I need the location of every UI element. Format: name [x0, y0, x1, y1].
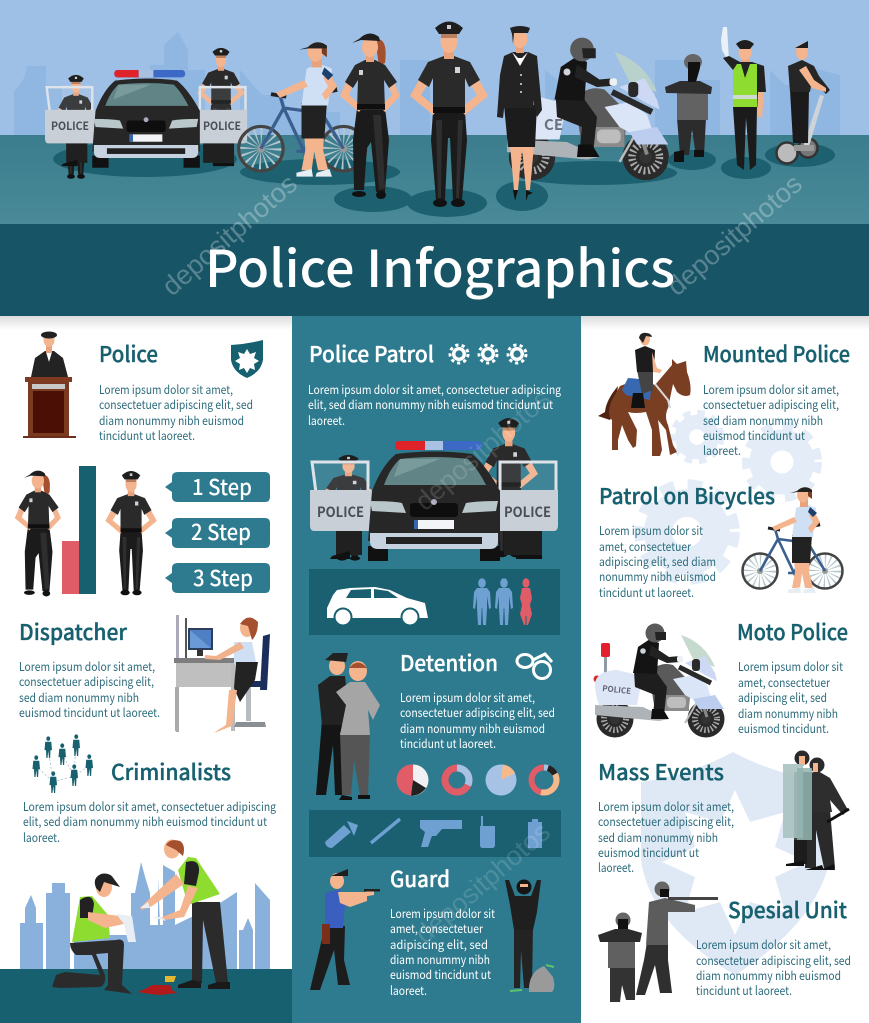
text: mounted body: euismod tincidunt ut: [703, 427, 805, 444]
hero: male officer: [407, 22, 488, 217]
hero: traffic officer in green vest: [721, 27, 771, 179]
hero: police team: [45, 22, 835, 217]
callout: 2 Step: 2 Step: [191, 515, 251, 547]
mounted officer on horse: [598, 332, 691, 456]
gears background: [642, 414, 816, 577]
police car with two officers: POLICE: [504, 502, 551, 522]
text: guard body: Lorem ipsum dolor sit: [390, 905, 495, 922]
text: detention body: consectetuer adipiscing elit, sed: [400, 704, 555, 721]
hero: motorcycle officer: [505, 38, 677, 185]
icon: blue figures: [473, 578, 513, 625]
special unit officers: [598, 882, 718, 1002]
pie 1: [396, 764, 428, 796]
text: mounted body: Lorem ipsum dolor sit amet,: [703, 381, 839, 398]
text: dispatcher body: [19, 658, 160, 721]
text: guard body: diam nonummy nibh: [390, 951, 490, 968]
text: dispatcher body: sed diam nonummy nibh: [19, 689, 139, 706]
text: patrol body: elit, sed diam nonummy nibh euismod tincidunt ut: [308, 396, 553, 413]
text: dispatcher body: Lorem ipsum dolor sit amet,: [19, 658, 155, 675]
text: moto body: euismod tincidunt.: [738, 720, 829, 737]
strip: car and people: [309, 569, 560, 635]
text: moto body: amet, consectetuer: [738, 674, 830, 691]
icon: baton: [371, 819, 400, 843]
heading: Mounted Police: Mounted Police: [703, 337, 850, 369]
strip: equipment icons: [309, 810, 561, 857]
icon: walkie talkie: [480, 816, 495, 848]
panel: center column: [292, 316, 581, 1023]
watermark left: depositphotos: [156, 169, 303, 302]
icon: handcuffs: [517, 654, 552, 678]
text: guard body: adipiscing elit, sed: [390, 936, 488, 953]
icon: people network: [32, 734, 93, 793]
hero: female officer in suit: [496, 26, 548, 211]
text: bicycles body: nonummy nibh euismod: [599, 568, 716, 585]
kneeling investigator: [52, 874, 136, 994]
text: detention body: diam nonummy nibh euismod: [400, 720, 545, 737]
standing investigator: [140, 840, 230, 989]
officer detaining suspect: [316, 653, 380, 800]
hero: woman officer: [334, 33, 412, 212]
text: mounted body: laoreet.: [703, 442, 741, 459]
text: bicycles body: amet, consectetuer: [599, 538, 691, 555]
watermark center top: depositphotos: [409, 384, 556, 517]
motorcycle officer: [594, 624, 724, 738]
text: detention body: [400, 689, 555, 752]
icons: three gears: [450, 345, 526, 363]
robber with bag: [505, 880, 554, 992]
text: mass events body: [598, 798, 734, 876]
text: police body: diam nonummy nibh euismod: [99, 412, 244, 429]
text: moto body: Lorem ipsum dolor sit: [738, 658, 843, 675]
text: patrol body: [308, 381, 561, 429]
ground strip: [0, 969, 292, 1023]
hero: police car with two officers: [45, 48, 247, 179]
police car with two officers: POLICE: [317, 502, 364, 522]
text: detention body: Lorem ipsum dolor sit amet,: [400, 689, 535, 706]
text: moto body: adipiscing elit, sed: [738, 689, 827, 706]
donut 4: [532, 768, 556, 792]
title band: [0, 224, 869, 316]
crime scene: blood and marker: [138, 976, 177, 995]
riot officers with shield: [783, 750, 849, 870]
text: detention body: tincidunt ut laoreet.: [400, 735, 496, 752]
text: police body: tincidunt ut laoreet.: [99, 427, 195, 444]
icon: pistol: [420, 820, 462, 847]
heading: Guard: Guard: [390, 862, 450, 894]
text: special unit body: tincidunt ut laoreet.: [696, 982, 792, 999]
text: guard body: [390, 905, 495, 999]
text: bicycles body: adipiscing elit, sed diam: [599, 553, 716, 570]
text: mounted body: sed diam nonummy nibh: [703, 412, 823, 429]
text: patrol body: laoreet.: [308, 412, 345, 429]
text: bicycles body: Lorem ipsum dolor sit: [599, 522, 703, 539]
male officer: [105, 471, 157, 595]
heading: Spesial Unit: Spesial Unit: [728, 893, 847, 925]
woman officer: [15, 471, 61, 596]
text: dispatcher body: euismod tincidunt ut laoreet.: [19, 704, 160, 721]
text: criminalists body: laoreet.: [23, 829, 60, 846]
icon: shield: [231, 340, 263, 378]
watermark center bottom: depositphotos: [409, 817, 556, 950]
donut 2: [445, 768, 469, 792]
text: bicycles body: [599, 522, 716, 601]
hero: segway officer: [765, 41, 835, 167]
heading: Mass Events: Mass Events: [598, 755, 724, 787]
hero: masked special unit officer: [665, 54, 716, 170]
text: mass events body: euismod tincidunt ut: [598, 844, 699, 861]
text: police body: consectetuer adipiscing elit, sed: [99, 396, 253, 413]
bicycle officer: [742, 487, 842, 593]
text: guard body: amet, consectetuer: [390, 920, 483, 937]
icon: canister: [528, 819, 542, 848]
step callouts: [165, 470, 270, 593]
pie 3: [486, 764, 516, 796]
heading: Detention: Detention: [400, 646, 498, 678]
text: criminalists body: [23, 798, 276, 846]
text: police body: Lorem ipsum dolor sit amet,: [99, 381, 233, 398]
hero: bicycle officer: [239, 42, 400, 185]
watermark right: depositphotos: [661, 169, 808, 302]
police car with two officers: [310, 418, 558, 561]
callout: 1 Step: 1 Step: [192, 470, 252, 502]
hero: motorcycle officer: CE: [544, 114, 563, 135]
text: mass events body: Lorem ipsum dolor sit amet,: [598, 798, 734, 815]
icon: white car: [327, 587, 428, 626]
callout: 3 Step: 3 Step: [193, 561, 253, 593]
heading: Patrol on Bicycles: Patrol on Bicycles: [599, 479, 775, 511]
dispatcher at desk: [174, 615, 270, 733]
text: mass events body: consectetuer adipiscing elit,: [598, 813, 734, 830]
skyline: [14, 32, 840, 136]
text: criminalists body: elit, sed diam nonummy nibh euismod tincidunt ut: [23, 813, 267, 830]
text: guard body: euismod tincidunt ut: [390, 966, 491, 983]
text: patrol body: Lorem ipsum dolor sit amet, consectetuer adipiscing: [308, 381, 561, 398]
background shield with star: [641, 752, 830, 975]
text: dispatcher body: consectetuer adipiscing elit,: [19, 673, 154, 690]
text: special unit body: [696, 936, 851, 999]
text: mounted body: consectetuer adipiscing elit,: [703, 396, 839, 413]
text: mass events body: sed diam nonummy nibh: [598, 829, 718, 846]
text: moto body: diam nonummy nibh: [738, 705, 838, 722]
motorcycle officer: POLICE: [602, 683, 632, 697]
heading: Police Patrol: Police Patrol: [309, 337, 434, 369]
text: bicycles body: tincidunt ut laoreet.: [599, 584, 694, 601]
heading: Moto Police: Moto Police: [737, 615, 848, 647]
guard officer aiming: [310, 869, 380, 990]
text: mass events body: laoreet.: [598, 859, 634, 876]
panel: left column: [0, 316, 292, 1023]
text: criminalists body: Lorem ipsum dolor sit amet, consectetuer adipiscing: [23, 798, 276, 815]
text: police body: [99, 381, 253, 444]
text: guard body: laoreet.: [390, 982, 427, 999]
hero: police car with two officers: POLICE: [51, 118, 89, 134]
text: special unit body: diam nonummy nibh euismod: [696, 967, 841, 984]
pie charts: [396, 764, 556, 796]
police podium officer: [23, 332, 76, 438]
heading: Dispatcher: Dispatcher: [19, 615, 128, 647]
ground: [0, 135, 869, 224]
icon: flashlight: [325, 821, 358, 848]
text: moto body: [738, 658, 843, 737]
background: sky: [0, 0, 869, 136]
heading: Criminalists: Criminalists: [111, 755, 231, 787]
text: special unit body: Lorem ipsum dolor sit amet,: [696, 936, 831, 953]
bar chart: [62, 466, 96, 594]
city skyline: [20, 862, 270, 970]
heading: Police: Police: [99, 337, 158, 369]
title: Police Infographics: [205, 228, 675, 302]
icon: red figure: [520, 578, 532, 625]
text: mounted body: [703, 381, 839, 459]
hero: police car with two officers: POLICE: [203, 118, 241, 134]
panel: right column: [581, 316, 869, 1023]
